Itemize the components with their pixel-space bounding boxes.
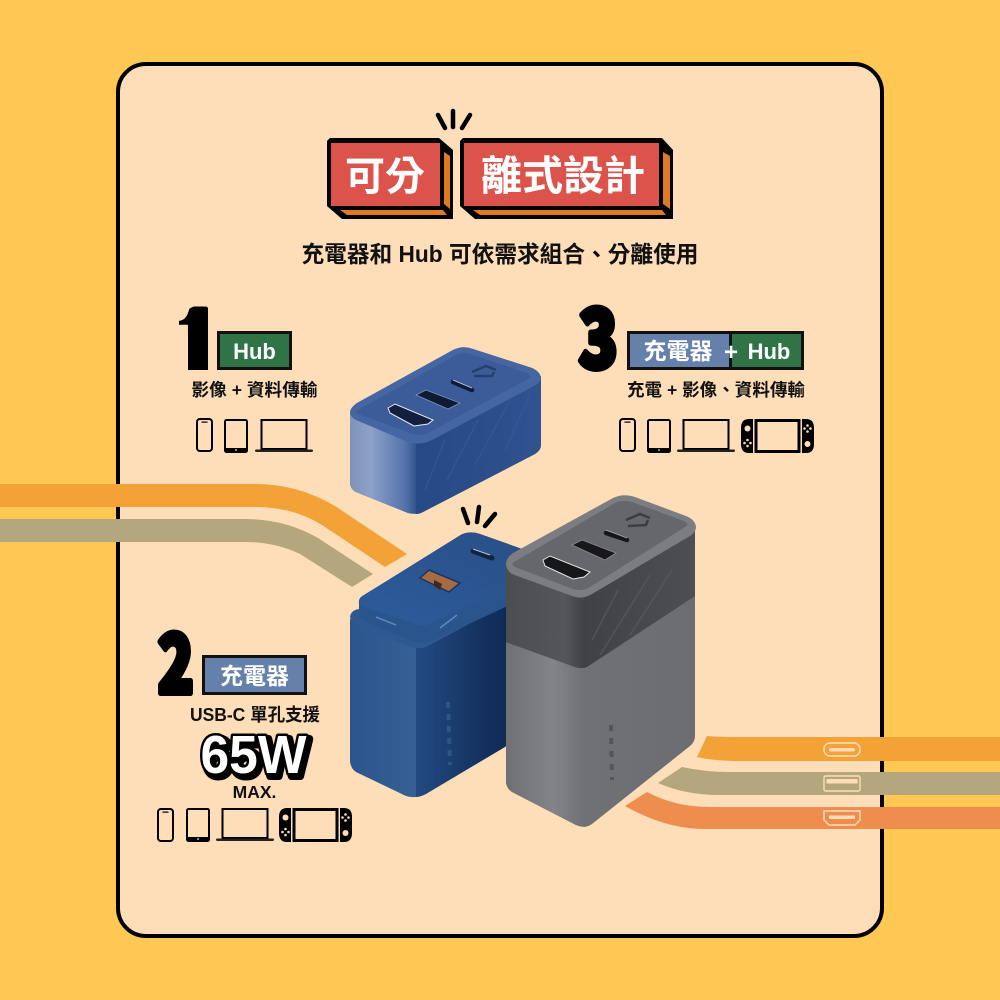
- icon: hdmi port: [824, 811, 860, 825]
- panel: main card: [118, 64, 882, 936]
- description: 充電 + 影像、資料傳輸: [627, 380, 805, 400]
- max label: MAX.: [233, 782, 276, 802]
- title: [327, 138, 673, 219]
- device icons: [158, 808, 352, 842]
- tag: charger + hub: [628, 332, 802, 369]
- section 2: [158, 601, 352, 842]
- device icons: [197, 419, 313, 452]
- icon: usb-c port: [824, 743, 860, 756]
- tag: charger: 充電器: [220, 657, 289, 691]
- tag: charger: [204, 656, 306, 694]
- tag: hub: Hub: [233, 339, 276, 364]
- product: hub on charger (gray): [506, 495, 696, 827]
- ribbons: left: [0, 484, 407, 587]
- product: charger (blue): [350, 532, 525, 797]
- product: hub module (blue): [350, 347, 541, 514]
- number 3: 3: [579, 275, 618, 391]
- section 1: [179, 306, 318, 453]
- tag: charger + hub: 充電器: [644, 332, 712, 366]
- tag: charger + hub: +: [724, 339, 738, 366]
- tag: charger + hub: Hub: [748, 339, 790, 364]
- device icons: [620, 419, 814, 453]
- number 1: 1: [169, 276, 223, 392]
- burst marks above charger: [463, 507, 495, 526]
- description: 影像 + 資料傳輸: [192, 380, 318, 400]
- power value: 65W: 65W: [200, 725, 307, 785]
- title button: left: [327, 138, 453, 219]
- number 2: 2: [158, 601, 194, 717]
- burst marks above title: [438, 111, 470, 128]
- ribbons: right with port icons: [625, 736, 1000, 829]
- subtitle: 充電器和 Hub 可依需求組合、分離使用: [302, 241, 698, 267]
- power value: 65W: 65W: [204, 728, 310, 788]
- icon: usb-a port: [824, 776, 860, 791]
- description: USB-C 單孔支援: [190, 705, 320, 725]
- title button: right: [460, 138, 673, 219]
- title button: right: 離式設計: [481, 142, 645, 202]
- tag: hub: [218, 332, 290, 368]
- title button: left: 可分: [345, 144, 425, 202]
- section 3: [579, 275, 814, 453]
